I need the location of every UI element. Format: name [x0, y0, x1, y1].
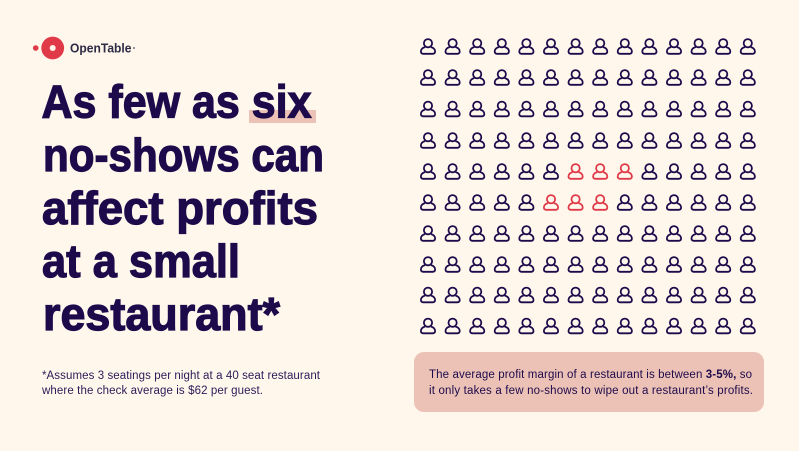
callout: The average profit margin of a restaurant is between 3-5%, so	[429, 369, 752, 381]
logo: OpenTable	[33, 37, 135, 59]
highlight behind six	[249, 110, 316, 123]
title: no-shows can	[43, 129, 324, 181]
title	[42, 76, 324, 340]
title: restaurant*	[43, 288, 280, 340]
footnote	[41, 370, 321, 397]
people grid: 140 icons, 6 highlighted	[421, 39, 755, 333]
footnote: *Assumes 3 seatings per night at a 40 seat restaurant	[42, 370, 321, 382]
title: As few as six	[42, 76, 312, 128]
callout	[414, 352, 764, 412]
title: affect profits	[42, 182, 318, 234]
footnote: where the check average is $62 per guest.	[41, 385, 263, 397]
logo: OpenTable: OpenTable	[70, 41, 132, 56]
title: at a small	[42, 235, 240, 287]
callout: it only takes a few no-shows to wipe out a restaurant’s profits.	[429, 385, 753, 397]
